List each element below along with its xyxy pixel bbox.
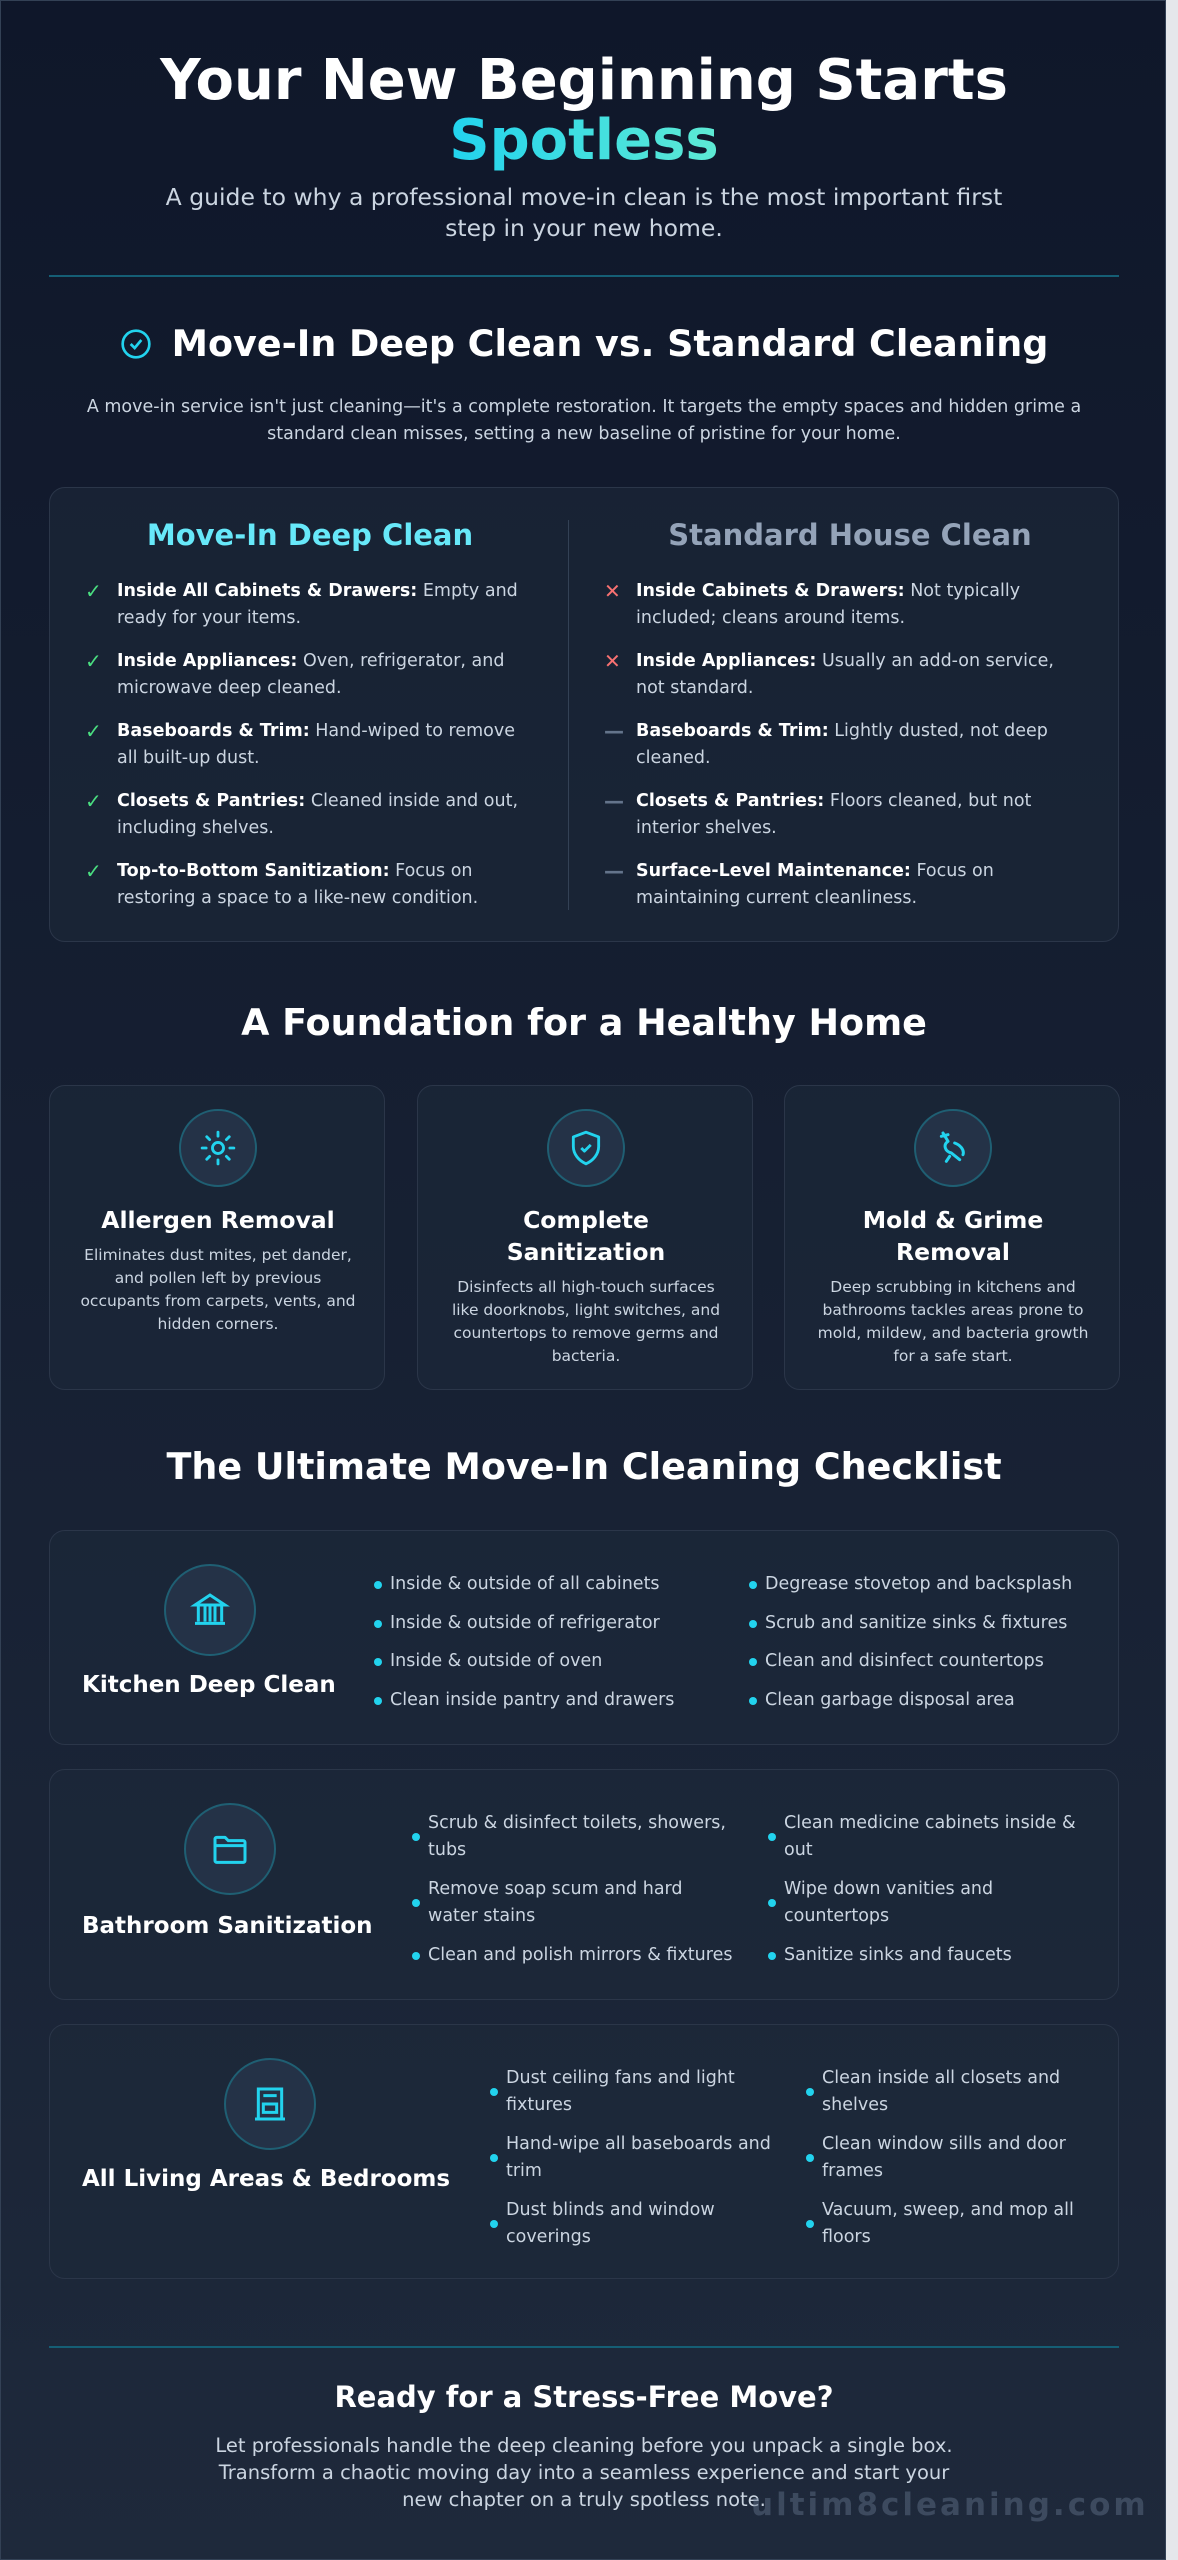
panel: living areas: All Living Areas & Bedrooms [82,2166,450,2192]
list: standard clean [604,579,1054,908]
panel: bathroom: Scrub & disinfect toilets, showers, tubs [428,1813,726,1860]
list: deep clean: Top-to-Bottom Sanitization: Focus on restoring a space to a like-new condition. [117,861,478,908]
panel: comparison: ✓ [85,789,102,813]
panel: kitchen: Inside & outside of all cabinets [390,1574,660,1594]
card: sanitization: Complete [523,1206,649,1234]
panel: living areas [49,2024,1119,2279]
title [160,48,1008,173]
panel: comparison [49,487,1119,942]
icon: scrub [914,1109,992,1187]
card: sanitization [417,1085,753,1390]
card: sanitization: Sanitization [507,1238,665,1266]
panel: living areas: Dust ceiling fans and light fixtures [506,2068,735,2115]
card: mold: Deep scrubbing in kitchens and bathrooms tackles areas prone to mold, mildew, and bacteria growth for a safe start. [818,1278,1088,1365]
title: Spotless [449,108,719,173]
panel: comparison: — [604,719,624,743]
panel: bathroom [49,1769,1119,2000]
card: allergen: Allergen Removal [101,1206,335,1234]
section heading: comparison: Move-In Deep Clean vs. Standard Cleaning [172,322,1048,365]
panel: comparison: ✓ [85,859,102,883]
heading: foundation: A Foundation for a Healthy Home [241,1001,927,1044]
list: deep clean: Baseboards & Trim: Hand-wiped to remove all built-up dust. [117,721,515,768]
subtitle: A guide to why a professional move-in clean is the most important first step in your new home. [166,183,1002,242]
intro text: A move-in service isn't just cleaning—it's a complete restoration. It targets the empty spaces and hidden grime a standard clean misses, setting a new baseline of pristine for your home. [87,397,1081,444]
icon: sun [179,1109,257,1187]
panel: living areas: Hand-wipe all baseboards and trim [506,2134,771,2181]
CTA text: Let professionals handle the deep cleaning before you unpack a single box. Transform a chaotic moving day into a seamless experience and start your new chapter on a truly spotless note. [215,2434,953,2511]
list: deep clean: Inside All Cabinets & Drawers: Empty and ready for your items. [117,581,518,628]
list: standard clean: Baseboards & Trim: Lightly dusted, not deep cleaned. [636,721,1048,768]
panel: kitchen: Kitchen Deep Clean [82,1672,336,1698]
list: standard clean: Inside Appliances: Usually an add-on service, not standard. [636,651,1054,698]
list: deep clean: Closets & Pantries: Cleaned inside and out, including shelves. [117,791,518,838]
panel: bathroom: Bathroom Sanitization [82,1913,373,1939]
watermark: ultim8cleaning.com [751,2487,1149,2523]
list: standard clean: Surface-Level Maintenance: Focus on maintaining current cleanliness. [636,861,994,908]
right column heading: Standard House Clean [668,518,1032,552]
icon: door [224,2058,316,2150]
list: standard clean: Closets & Pantries: Floors cleaned, but not interior shelves. [636,791,1031,838]
panel: bathroom: Wipe down vanities and countertops [784,1879,993,1926]
panel: kitchen: Clean inside pantry and drawers [390,1690,674,1710]
panel: kitchen: Inside & outside of refrigerator [390,1613,660,1633]
panel: kitchen: Clean and disinfect countertops [765,1651,1044,1671]
panel: kitchen: Degrease stovetop and backsplash [765,1574,1072,1594]
list: standard clean: Inside Cabinets & Drawers: Not typically included; cleans around items. [636,581,1020,628]
panel: living areas: Clean inside all closets and shelves [822,2068,1060,2115]
card: mold: Mold & Grime [863,1206,1043,1234]
title: Your New Beginning Starts [160,48,1008,113]
panel: bathroom: Remove soap scum and hard water stains [428,1879,683,1926]
card: allergen: Eliminates dust mites, pet dander, and pollen left by previous occupants from carpets, vents, and hidden corners. [80,1246,356,1333]
list: deep clean [85,579,518,908]
panel: kitchen: Scrub and sanitize sinks & fixtures [765,1613,1067,1633]
panel: comparison: ✕ [604,579,621,603]
icon: kitchen [164,1564,256,1656]
panel: living areas: Clean window sills and door frames [822,2134,1066,2181]
card: mold [784,1085,1120,1390]
panel: comparison: — [604,789,624,813]
panel: comparison: ✕ [604,649,621,673]
panel: living areas: Vacuum, sweep, and mop all floors [822,2200,1074,2247]
icon: shield [547,1109,625,1187]
icon: folder [184,1803,276,1895]
list: deep clean: Inside Appliances: Oven, refrigerator, and microwave deep cleaned. [117,651,504,698]
panel: living areas: Dust blinds and window coverings [506,2200,715,2247]
panel: bathroom: Sanitize sinks and faucets [784,1945,1012,1965]
panel: comparison: ✓ [85,649,102,673]
panel: bathroom: Clean medicine cabinets inside & out [784,1813,1076,1860]
panel: comparison: ✓ [85,719,102,743]
card: allergen [49,1085,385,1390]
panel: kitchen: Clean garbage disposal area [765,1690,1015,1710]
panel: bathroom: Clean and polish mirrors & fixtures [428,1945,732,1965]
card: sanitization: Disinfects all high-touch surfaces like doorknobs, light switches, and countertops to remove germs and bacteria. [452,1278,720,1365]
left column heading: Move-In Deep Clean [147,518,473,552]
panel: kitchen [49,1530,1119,1745]
heading: checklist: The Ultimate Move-In Cleaning Checklist [166,1445,1002,1488]
card: mold: Removal [896,1238,1010,1266]
CTA heading: Ready for a Stress-Free Move? [334,2380,834,2414]
panel: kitchen: Inside & outside of oven [390,1651,602,1671]
panel: comparison: ✓ [85,579,102,603]
panel: comparison: — [604,859,624,883]
